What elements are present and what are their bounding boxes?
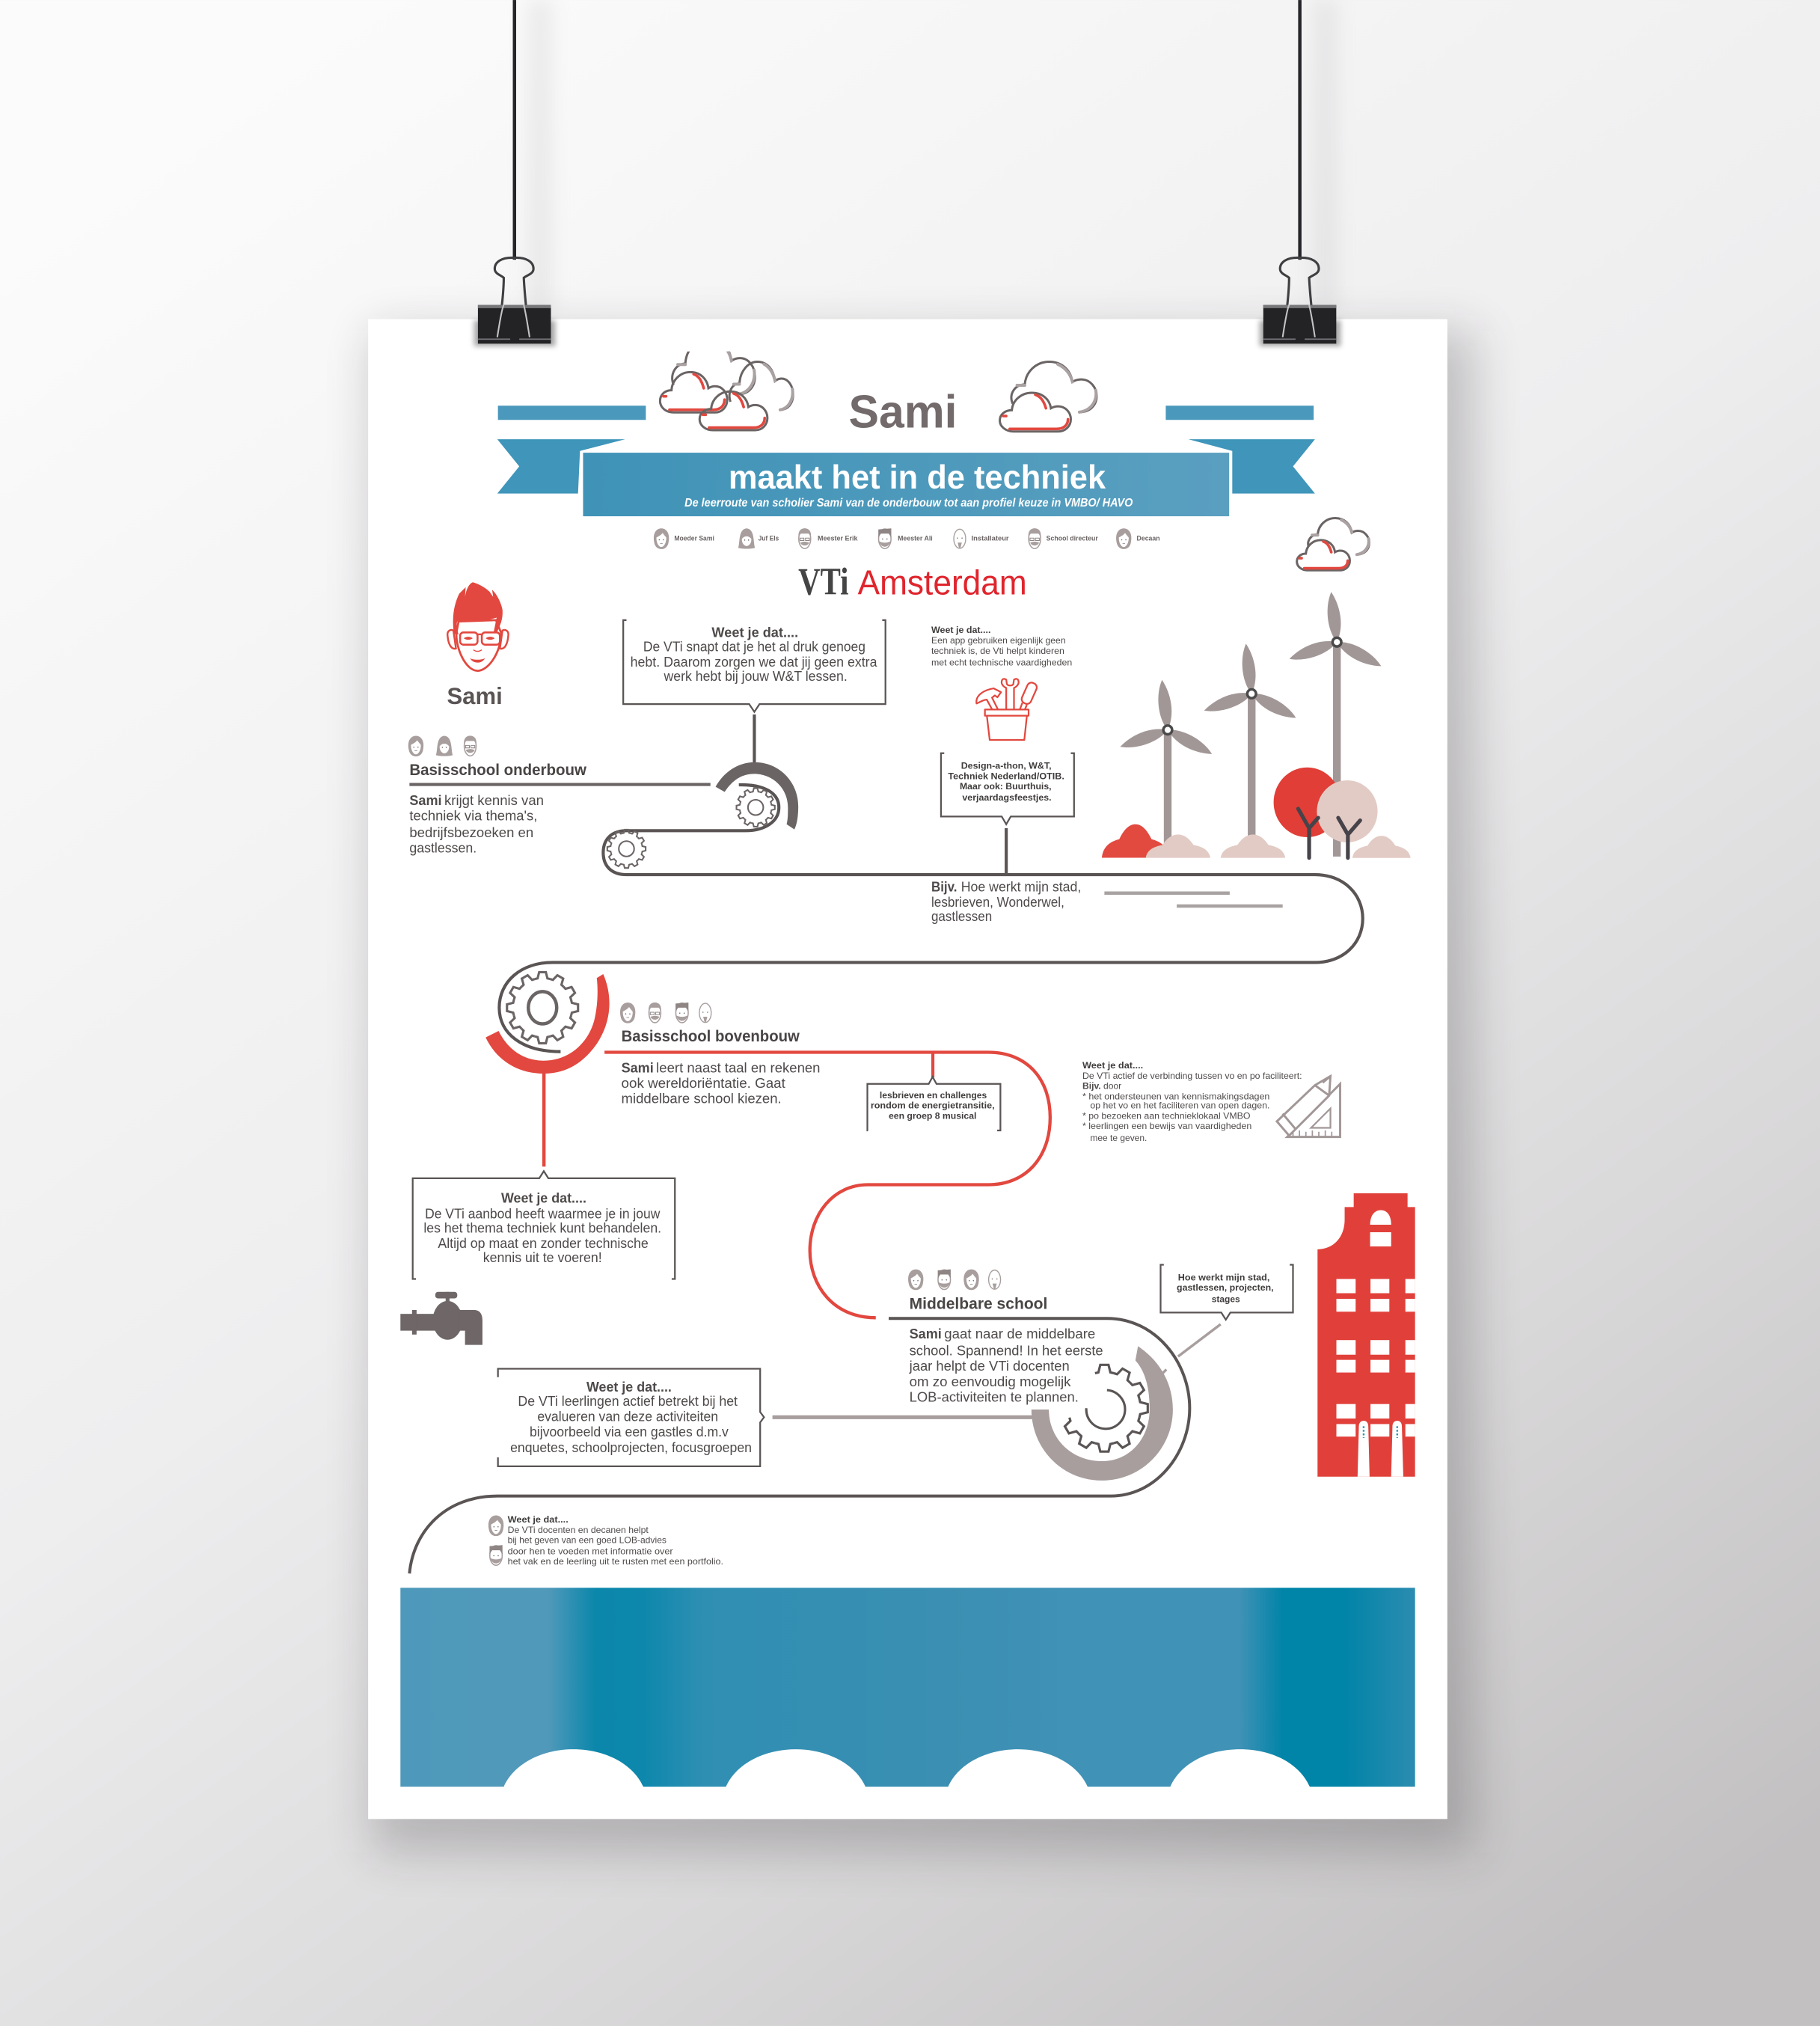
callout: leerlingen betrekken bbox=[498, 1369, 764, 1466]
cloud top right bbox=[1297, 518, 1369, 570]
road: lower dark section bbox=[409, 1318, 1189, 1573]
windmill 2 bbox=[1202, 643, 1299, 846]
windmill 1 bbox=[1118, 679, 1215, 846]
ribbon tail right bbox=[1189, 439, 1315, 494]
text: app tip bbox=[931, 625, 1072, 667]
hanging wire and clip right bbox=[1263, 0, 1336, 343]
road: dark upper section bbox=[499, 785, 1363, 1052]
icon: Amsterdam canal house bbox=[1317, 1193, 1415, 1477]
windmills and trees scene bbox=[1102, 591, 1411, 858]
heading group: Middelbare school: Middelbare school bbox=[910, 1294, 1047, 1312]
text: decanen tip: De VTi docenten en decanen helpt bbox=[508, 1525, 649, 1535]
text: decanen tip: door hen te voeden met informatie over bbox=[508, 1546, 673, 1556]
text: onderbouw: krijgt kennis van bbox=[444, 793, 544, 808]
hanging wire and clip left bbox=[478, 0, 551, 343]
text: onderbouw: techniek via thema's, bbox=[409, 809, 537, 824]
text: verbinding vo po: Bijv. door bbox=[1082, 1081, 1121, 1092]
text: Bijv: gastlessen bbox=[931, 909, 992, 924]
cloud group right bbox=[1000, 362, 1097, 432]
heading group: Middelbare school bbox=[908, 1270, 1047, 1312]
heading group: Basisschool onderbouw: Basisschool onderbouw bbox=[409, 760, 586, 779]
text: Bijv bbox=[931, 880, 1081, 924]
text: middelbare school: Sami bbox=[910, 1326, 942, 1341]
callout: leerlingen betrekken: Weet je dat.... bbox=[586, 1380, 672, 1395]
ribbon banner bbox=[497, 439, 1315, 517]
legend of people: School directeur bbox=[1047, 535, 1098, 543]
text: verbinding vo po: * po bezoeken aan technieklokaal VMBO bbox=[1082, 1110, 1251, 1121]
text: bovenbouw: leert naast taal en rekenen bbox=[656, 1060, 820, 1075]
road: red section bbox=[604, 1052, 1050, 1317]
callout: lesbrieven bbox=[868, 1077, 1000, 1130]
callout: Hoe werkt: stages bbox=[1212, 1294, 1240, 1305]
header bar left bbox=[498, 405, 646, 420]
banner subtitle: De leerroute van scholier Sami van de onderbouw tot aan profiel keuze in VMBO/ HAVO bbox=[684, 497, 1133, 509]
logo VTi Amsterdam: Amsterdam bbox=[858, 563, 1027, 602]
connector to first gear bbox=[753, 714, 756, 764]
legend of people: Meester Ali bbox=[898, 535, 933, 543]
text: bovenbouw: ook wereldoriëntatie. Gaat bbox=[622, 1076, 785, 1091]
text: verbinding vo po: Weet je dat.... bbox=[1082, 1060, 1143, 1071]
callout: VTi snapt: Weet je dat.... bbox=[711, 625, 798, 640]
text: onderbouw: Sami bbox=[409, 793, 442, 808]
callout: leerlingen betrekken: evalueren van deze activiteiten bbox=[537, 1409, 718, 1424]
poster sheet bbox=[368, 319, 1447, 1819]
heading group: Basisschool bovenbouw bbox=[620, 1003, 800, 1045]
grey connector bbox=[773, 1416, 1032, 1419]
red branch to callout bbox=[931, 1052, 934, 1077]
text: middelbare school: school. Spannend! In het eerste bbox=[910, 1343, 1103, 1358]
icon: toolbox pot bbox=[976, 679, 1038, 740]
legend of people bbox=[654, 528, 1160, 549]
first gear arc bbox=[716, 762, 798, 830]
header bar right bbox=[1165, 405, 1314, 420]
text: Bijv: Bijv. bbox=[931, 880, 958, 895]
heading group: Basisschool bovenbouw: Basisschool bovenbouw bbox=[622, 1026, 800, 1045]
cloud group left bbox=[658, 352, 794, 431]
callout: VTi aanbod: kennis uit te voeren! bbox=[483, 1250, 602, 1265]
callout: VTi snapt: werk hebt bij jouw W&T lessen. bbox=[664, 669, 848, 684]
text: bovenbouw: middelbare school kiezen. bbox=[622, 1092, 782, 1107]
text: verbinding vo po bbox=[1082, 1060, 1302, 1143]
callout: VTi aanbod bbox=[413, 1171, 675, 1279]
callout: leerlingen betrekken: bijvoorbeeld via een gastles d.m.v bbox=[530, 1424, 729, 1439]
gear large bovenbouw bbox=[507, 972, 578, 1043]
text: decanen tip: Weet je dat.... bbox=[508, 1514, 569, 1525]
callout: lesbrieven: lesbrieven en challenges bbox=[880, 1090, 987, 1101]
text: Bijv: lesbrieven, Wonderwel, bbox=[931, 895, 1064, 910]
text: verbinding vo po: * leerlingen een bewijs van vaardigheden bbox=[1082, 1121, 1251, 1131]
logo VTi Amsterdam: VTi bbox=[798, 560, 848, 603]
callout: VTi aanbod: Altijd op maat en zonder technische bbox=[438, 1236, 649, 1251]
bushes bbox=[1102, 824, 1411, 858]
text: bovenbouw: Sami bbox=[622, 1060, 654, 1075]
banner title: maakt het in de techniek bbox=[729, 458, 1106, 496]
gear ring arc bbox=[1086, 1390, 1125, 1429]
icon: water tap bbox=[400, 1292, 482, 1345]
icon: pencil and set square bbox=[1277, 1076, 1341, 1137]
heading group: Basisschool onderbouw bbox=[408, 735, 711, 786]
callout: Design-a-thon: Techniek Nederland/OTIB. bbox=[948, 771, 1064, 781]
legend of people: Decaan bbox=[1137, 535, 1160, 543]
callout: VTi aanbod: De VTi aanbod heeft waarmee je in jouw bbox=[425, 1206, 661, 1221]
ribbon tail left bbox=[497, 439, 625, 494]
text: app tip: met echt technische vaardigheden bbox=[931, 657, 1072, 667]
callout: VTi snapt: De VTi snapt dat je het al druk genoeg bbox=[643, 639, 865, 654]
gear small 2 bbox=[607, 830, 646, 868]
text: bovenbouw bbox=[622, 1060, 820, 1107]
trees bbox=[1274, 768, 1378, 858]
footer blue panel bbox=[400, 1588, 1415, 1787]
character: Sami portrait bbox=[447, 582, 509, 671]
text: onderbouw bbox=[409, 793, 544, 856]
callout: VTi aanbod: les het thema techniek kunt behandelen. bbox=[423, 1220, 661, 1235]
callout: VTi aanbod: Weet je dat.... bbox=[501, 1191, 586, 1206]
text: decanen tip: het vak en de leerling uit te rusten met een portfolio. bbox=[508, 1556, 723, 1567]
text: app tip: Weet je dat.... bbox=[931, 625, 990, 635]
callout: VTi snapt bbox=[623, 620, 886, 711]
callout: Design-a-thon: Maar ook: Buurthuis, bbox=[960, 781, 1052, 792]
callout: Design-a-thon bbox=[941, 753, 1074, 824]
callout: lesbrieven: rondom de energietransitie, bbox=[871, 1101, 995, 1111]
text: app tip: Een app gebruiken eigenlijk geen bbox=[931, 635, 1066, 646]
text: middelbare school: jaar helpt de VTi docenten bbox=[909, 1359, 1070, 1374]
text: onderbouw: bedrijfsbezoeken en bbox=[409, 825, 533, 840]
legend of people: Installateur bbox=[972, 535, 1009, 543]
grey crescent bbox=[1032, 1346, 1173, 1481]
text: app tip: techniek is, de Vti helpt kinderen bbox=[931, 646, 1064, 656]
callout: VTi snapt: hebt. Daarom zorgen we dat jij geen extra bbox=[631, 655, 877, 670]
connector callout to road bbox=[1156, 1324, 1221, 1380]
text: Bijv: Hoe werkt mijn stad, bbox=[961, 880, 1081, 895]
title: Sami: Sami bbox=[848, 387, 958, 438]
text: middelbare school bbox=[909, 1326, 1103, 1405]
red connector to tap callout bbox=[542, 1072, 545, 1166]
red crescent bbox=[485, 974, 610, 1074]
callout: Design-a-thon: Design-a-thon, W&T, bbox=[961, 760, 1052, 771]
text: verbinding vo po: * het ondersteunen van kennismakingsdagen bbox=[1082, 1092, 1269, 1102]
text: decanen tip bbox=[488, 1514, 723, 1567]
gear partial bbox=[1062, 1365, 1148, 1451]
callout: leerlingen betrekken: De VTi leerlingen actief betrekt bij het bbox=[518, 1394, 738, 1409]
callout: Hoe werkt: Hoe werkt mijn stad, bbox=[1178, 1272, 1269, 1282]
callout: Design-a-thon: verjaardagsfeestjes. bbox=[962, 792, 1052, 803]
ribbon main bbox=[583, 452, 1230, 517]
logo VTi Amsterdam bbox=[798, 560, 1027, 603]
text: verbinding vo po: mee te geven. bbox=[1090, 1133, 1147, 1143]
windmill 3 bbox=[1287, 591, 1384, 857]
legend of people: Juf Els bbox=[759, 535, 779, 543]
text: middelbare school: gaat naar de middelbare bbox=[944, 1326, 1095, 1341]
text: middelbare school: om zo eenvoudig mogelijk bbox=[910, 1374, 1071, 1389]
text: verbinding vo po: De VTi actief de verbinding tussen vo en po faciliteert: bbox=[1082, 1071, 1302, 1081]
callout: Hoe werkt: gastlessen, projecten, bbox=[1177, 1282, 1274, 1293]
connector to road bbox=[1005, 828, 1008, 875]
legend of people: Meester Erik bbox=[818, 535, 858, 543]
callout: lesbrieven: een groep 8 musical bbox=[889, 1110, 976, 1121]
text: decanen tip: bij het geven van een goed LOB-advies bbox=[508, 1535, 667, 1546]
text: verbinding vo po: op het vo en het faciliteren van open dagen. bbox=[1090, 1101, 1269, 1111]
callout: leerlingen betrekken: enquetes, schoolprojecten, focusgroepen bbox=[510, 1440, 752, 1455]
gear small 1 bbox=[737, 789, 775, 827]
callout: Hoe werkt bbox=[1160, 1265, 1293, 1320]
text: onderbouw: gastlessen. bbox=[409, 841, 477, 856]
legend of people: Moeder Sami bbox=[674, 535, 714, 543]
character name: Sami bbox=[447, 683, 503, 709]
text: middelbare school: LOB-activiteiten te plannen. bbox=[910, 1390, 1079, 1405]
